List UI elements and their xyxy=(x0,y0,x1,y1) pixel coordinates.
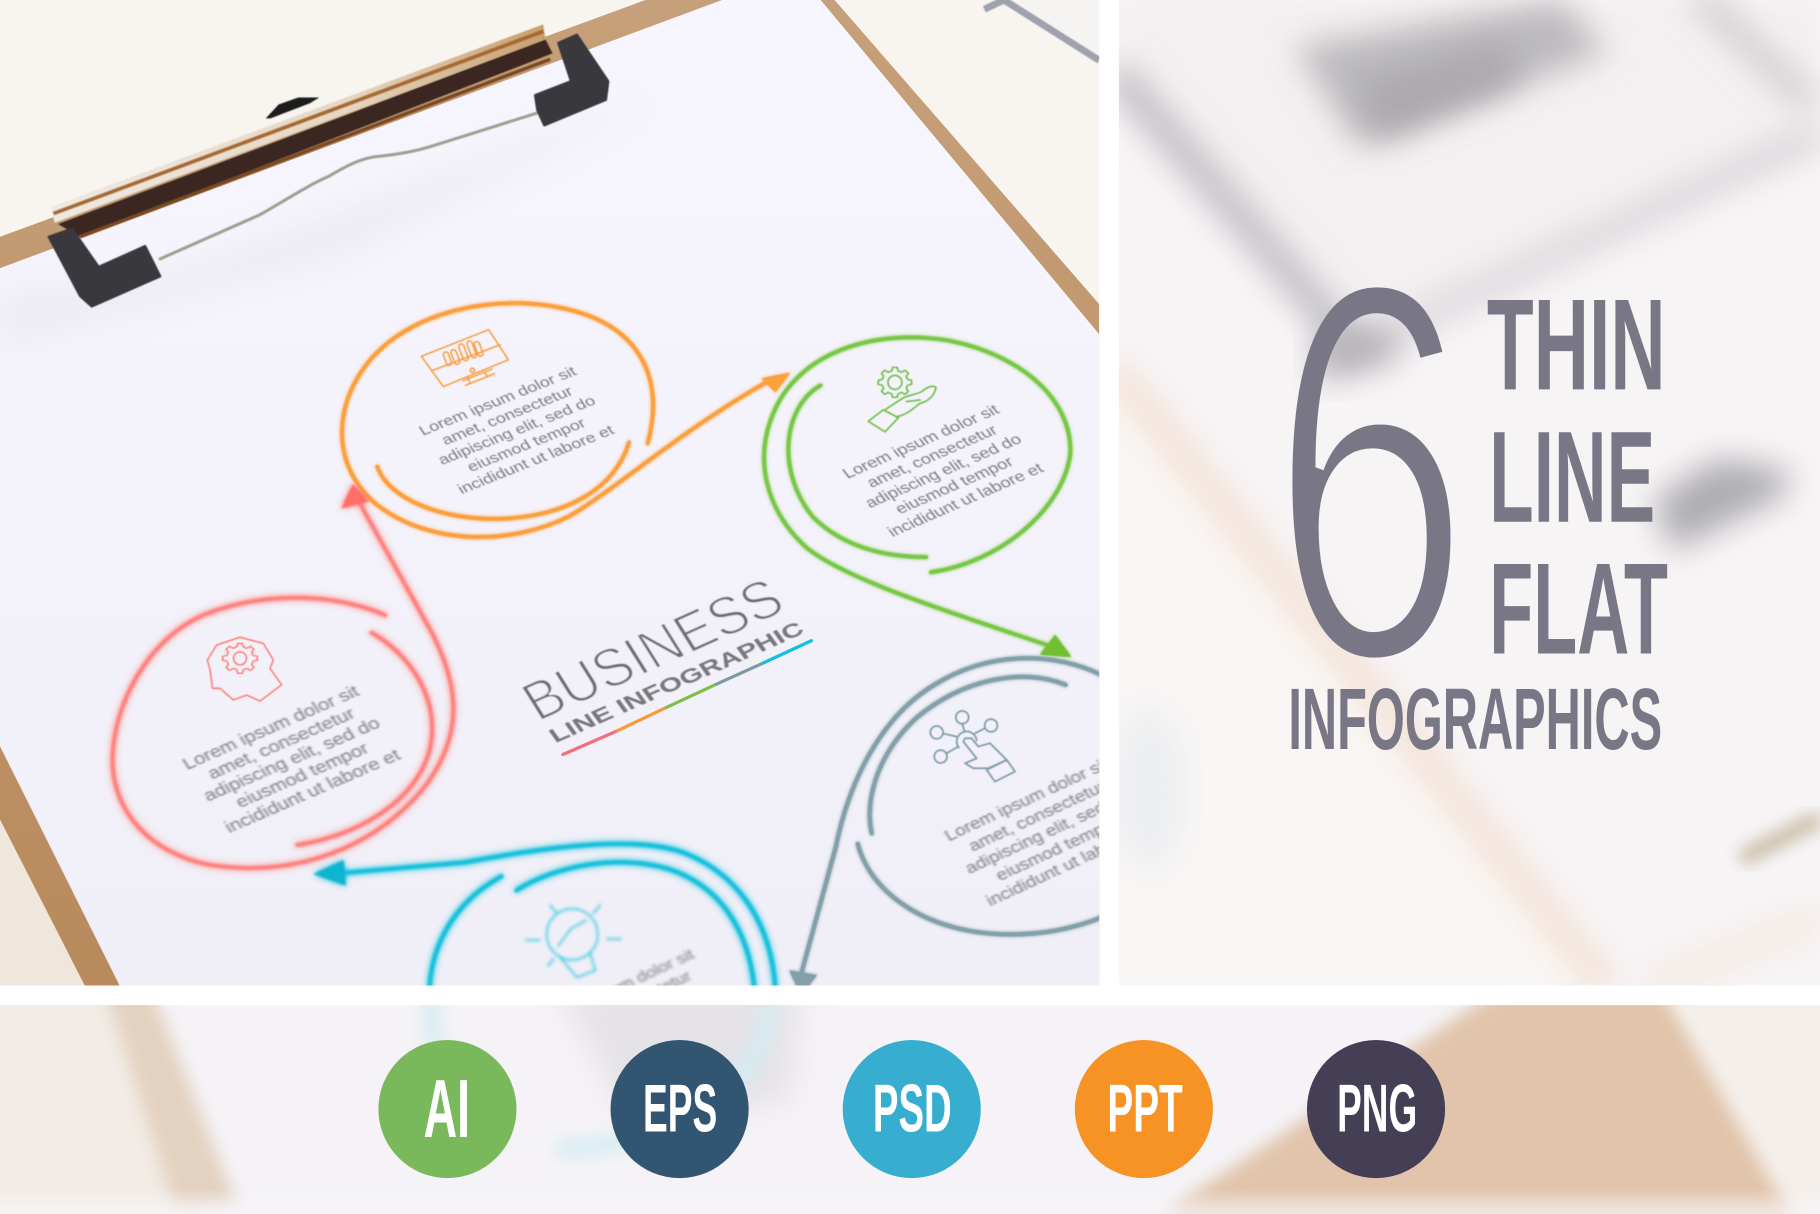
text: green step: incididunt ut labore et xyxy=(884,460,1047,540)
panel: blurred photo with title xyxy=(1114,0,1820,989)
badge: EPS xyxy=(611,1040,749,1178)
text: slate step: adipiscing elit, sed do xyxy=(961,787,1133,877)
text: green step: amet, consectetur xyxy=(863,421,1001,491)
text: red step: eiusmod tempor xyxy=(232,739,373,812)
icon: head with gear xyxy=(207,637,282,701)
badge: PPT: PPT xyxy=(1107,1072,1183,1147)
clip shadow xyxy=(0,99,650,348)
text: cyan step xyxy=(614,948,696,986)
title: line: LINE xyxy=(1489,404,1655,550)
metal clip xyxy=(49,24,608,306)
text: green step: Lorem ipsum dolor sit xyxy=(839,401,1003,482)
text: slate step: Lorem ipsum dolor sit xyxy=(941,754,1112,845)
step: orange circle xyxy=(342,303,790,537)
text: red step xyxy=(179,682,406,838)
paper sheet xyxy=(0,0,1099,985)
text: orange step: eiusmod tempor xyxy=(464,415,590,475)
heading: business line infographic: LINE INFOGRAPHIC xyxy=(545,618,809,747)
badge: PSD: PSD xyxy=(873,1072,952,1147)
text: slate step xyxy=(943,759,1100,906)
text: red step: amet, consectetur xyxy=(204,704,359,784)
panel: clipboard photo xyxy=(0,0,1100,986)
text: red step: adipiscing elit, sed do xyxy=(200,714,384,806)
badge: AI xyxy=(378,1040,517,1178)
text: slate step: amet, consectetur xyxy=(965,777,1109,855)
badge: AI: AI xyxy=(424,1063,470,1155)
arrowhead xyxy=(1040,635,1071,657)
badge: PNG xyxy=(1307,1040,1445,1178)
arrowhead xyxy=(761,373,790,392)
text: red step: incididunt ut labore et xyxy=(221,745,405,837)
text: orange step xyxy=(416,363,618,497)
icon: monitor xyxy=(421,330,508,387)
arrowhead xyxy=(313,860,346,886)
text: cyan step: Lorem ipsum dolor sit xyxy=(537,945,698,1031)
transparent object top right xyxy=(981,0,1099,70)
icon: touch network xyxy=(930,711,1015,782)
clipboard board xyxy=(0,0,1099,985)
text: slate step: incididunt ut labore et xyxy=(982,820,1153,910)
text: orange step: adipiscing elit, sed do xyxy=(435,393,599,468)
badge: PPT xyxy=(1075,1040,1213,1178)
title: thin: THIN xyxy=(1487,271,1666,417)
step: slate circle xyxy=(789,658,1103,996)
text: orange step: incididunt ut labore et xyxy=(454,422,618,497)
title: flat: FLAT xyxy=(1489,535,1668,681)
panel: format band xyxy=(0,987,1820,1214)
step: red circle xyxy=(113,484,453,868)
arrowhead xyxy=(341,484,369,508)
icon: hand and gear xyxy=(868,367,936,432)
step: cyan circle xyxy=(313,844,775,989)
title: big number 6: 6 xyxy=(1270,169,1471,774)
text: cyan step: amet, consectetur xyxy=(559,967,695,1040)
badge: PSD xyxy=(843,1040,981,1178)
text: red step: Lorem ipsum dolor sit xyxy=(179,682,364,774)
badge: PNG: PNG xyxy=(1337,1072,1417,1147)
text: slate step: eiusmod tempor xyxy=(992,813,1123,884)
text: green step: adipiscing elit, sed do xyxy=(861,430,1025,511)
icon: light bulb xyxy=(526,905,621,977)
text: green step xyxy=(839,401,1048,540)
text: orange step: amet, consectetur xyxy=(438,383,577,448)
badge: EPS: EPS xyxy=(643,1072,717,1147)
arrowhead xyxy=(788,968,818,986)
text: green step: eiusmod tempor xyxy=(891,453,1018,518)
heading: business line infographic: BUSINESS xyxy=(511,566,794,732)
step: green circle xyxy=(764,337,1071,657)
text: orange step: Lorem ipsum dolor sit xyxy=(416,363,580,439)
